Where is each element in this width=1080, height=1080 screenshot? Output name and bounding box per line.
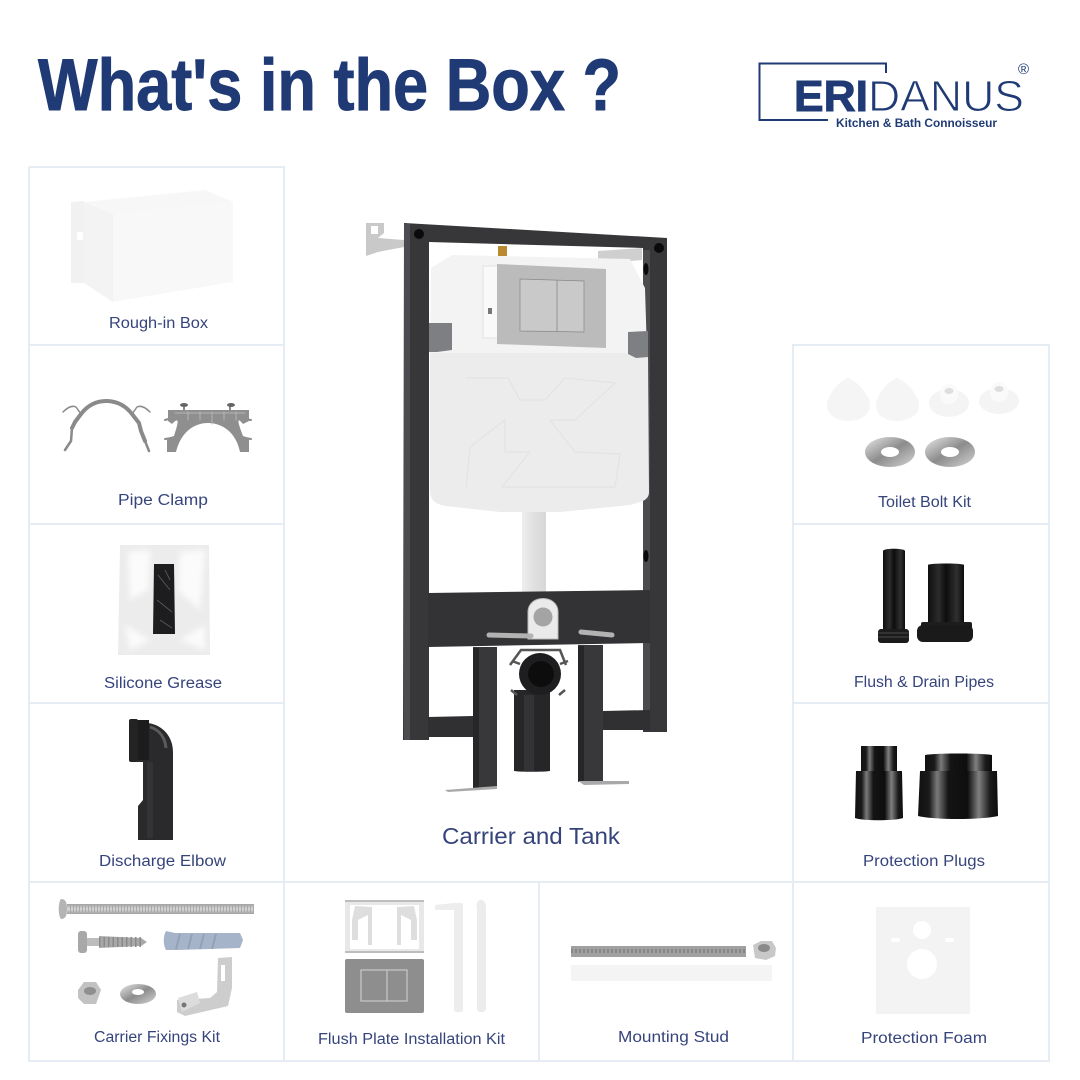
bend and studs xyxy=(528,598,558,639)
logo: Eridanus: DANUS xyxy=(868,72,1024,121)
wall brackets xyxy=(366,223,642,262)
label: Discharge Elbow: Discharge Elbow xyxy=(99,853,227,870)
label: Flush Plate Installation Kit: Flush Plate Installation Kit xyxy=(318,1031,506,1048)
logo: Eridanus: Kitchen & Bath Connoisseur xyxy=(836,118,998,130)
logo: Eridanus xyxy=(760,61,1029,130)
top rail and posts xyxy=(403,223,667,740)
icon: pipe clamp xyxy=(63,401,251,452)
icon: discharge elbow xyxy=(129,719,173,840)
label: Flush & Drain Pipes: Flush & Drain Pipes xyxy=(854,674,994,691)
panel: carrier and tank xyxy=(366,223,667,849)
label: Carrier and Tank: Carrier and Tank xyxy=(442,823,621,849)
label: Silicone Grease: Silicone Grease xyxy=(104,675,222,692)
logo: Eridanus: ® xyxy=(1018,61,1029,78)
label: Mounting Stud: Mounting Stud xyxy=(618,1029,729,1046)
flush pipe xyxy=(522,512,546,593)
icon: bolt caps and washers xyxy=(827,378,1019,467)
icon: plugs xyxy=(855,746,998,820)
title: What's in the Box ? xyxy=(38,45,621,126)
panel: protection foam xyxy=(861,907,987,1047)
label: Protection Foam: Protection Foam xyxy=(861,1030,987,1047)
legs and braces xyxy=(473,645,603,790)
icon: mounting frame, flush plate, rods xyxy=(345,900,486,1013)
panel: discharge elbow xyxy=(99,719,227,870)
panel: silicone grease xyxy=(104,545,222,692)
cross beam xyxy=(428,590,650,647)
logo: Eridanus: ERI xyxy=(794,72,868,121)
icon: pipes xyxy=(878,549,973,643)
icon: stud, nut and sleeve xyxy=(571,941,776,981)
icon: carrier frame and cistern xyxy=(366,223,667,792)
label: Rough-in Box: Rough-in Box xyxy=(109,315,208,332)
panel: protection plugs xyxy=(855,746,998,870)
drain elbow with clamp xyxy=(514,690,550,772)
icon: foam sheet xyxy=(876,907,970,1014)
label: Protection Plugs: Protection Plugs xyxy=(863,853,985,870)
cistern xyxy=(430,255,647,353)
panel: carrier fixings kit xyxy=(59,899,254,1046)
panel: pipe clamp xyxy=(63,401,251,509)
panel: flush plate installation kit xyxy=(318,900,506,1048)
panel: mounting stud xyxy=(571,941,776,1046)
icon: rough-in box xyxy=(71,190,233,302)
brass inlet xyxy=(498,246,507,256)
panel: flush and drain pipes xyxy=(854,549,994,691)
label: Toilet Bolt Kit: Toilet Bolt Kit xyxy=(878,494,972,511)
panel: rough-in box xyxy=(71,190,233,332)
icon: screws, plug, nut, washer, bracket xyxy=(59,899,254,1016)
label: Pipe Clamp: Pipe Clamp xyxy=(118,492,208,509)
panel: toilet bolt kit xyxy=(827,378,1019,511)
icon: silicone grease packet xyxy=(118,545,210,655)
label: Carrier Fixings Kit: Carrier Fixings Kit xyxy=(94,1029,221,1046)
